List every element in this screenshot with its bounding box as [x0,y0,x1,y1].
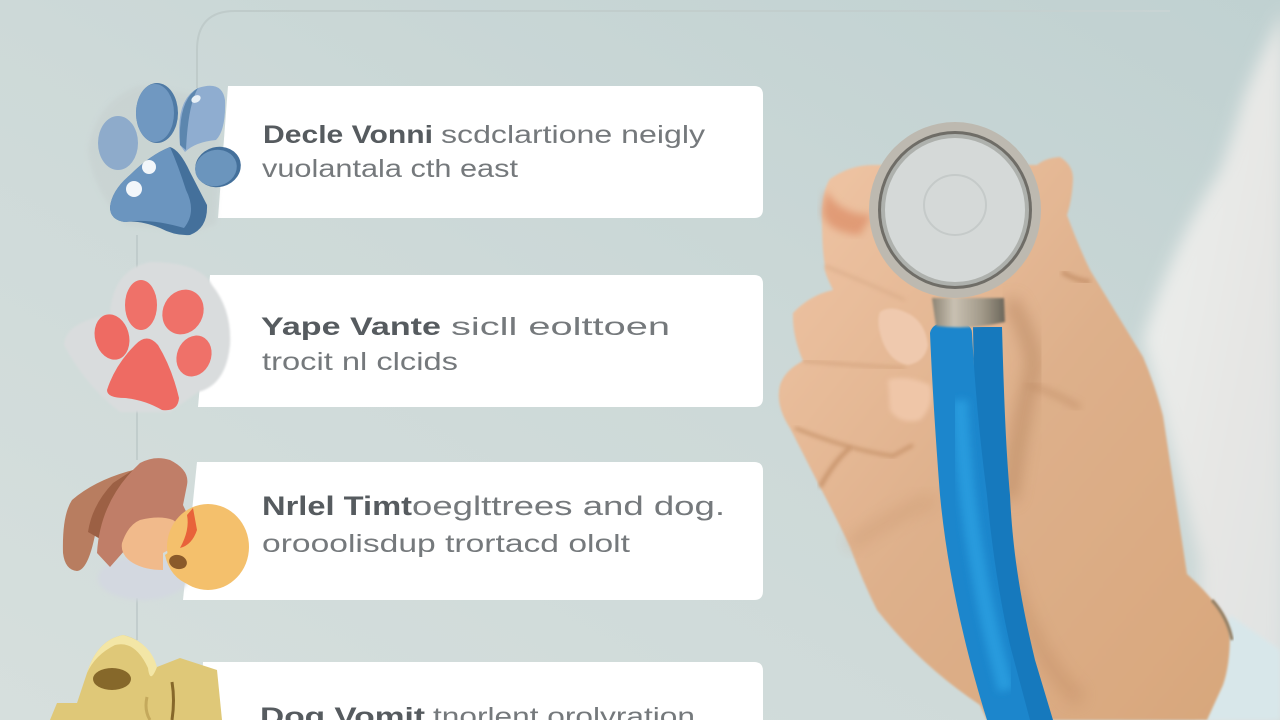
background panel outline [197,11,1170,88]
card text [262,121,706,183]
hand and forearm [779,157,1230,720]
card: Dog Vomit [200,662,763,720]
card text: vuolantala cth east [262,155,518,183]
card text: orooolisdup trortacd ololt [262,530,630,558]
timeline connectors [136,235,138,640]
card text: Decle Vonni [263,121,433,149]
icon: yellow dog [50,635,222,720]
card text [262,491,725,558]
fingernails [878,308,931,421]
icon: red paw [64,262,230,412]
card: Decle Vonni [218,86,763,218]
stethoscope collar [932,298,1005,327]
icon: dog head [63,458,249,600]
card text [261,313,670,376]
card text: scdclartione neigly [441,121,706,149]
stethoscope chest piece [869,122,1041,298]
stethoscope tubes [930,322,1053,720]
card: Nrlel Timt [183,462,763,600]
card text: trocit nl clcids [262,348,458,376]
skin shading [795,190,1232,700]
icon: blue paw [88,83,245,235]
card text: oeglttrees and dog. [412,491,725,521]
hand holding stethoscope [779,122,1232,720]
card text [260,703,695,720]
card: Yape Vante [198,275,763,407]
coat cuff [1195,615,1280,720]
card text: Nrlel Timt [262,491,412,521]
card text: sicll eolttoen [451,313,670,341]
card text: Yape Vante [261,313,441,341]
background white coat [1143,10,1280,720]
